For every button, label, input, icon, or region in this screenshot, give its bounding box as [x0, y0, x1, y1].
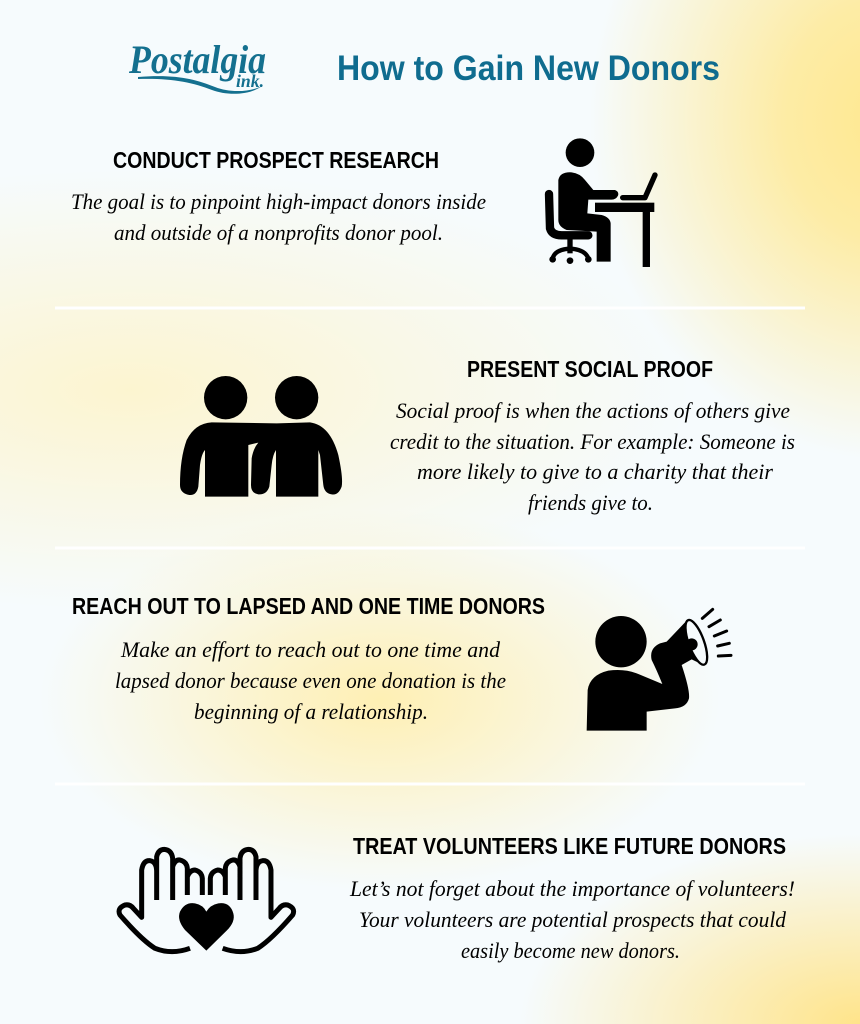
body text: beginning of a relationship. — [194, 699, 428, 724]
body text: easily become new donors. — [461, 938, 680, 963]
heading: CONDUCT PROSPECT RESEARCH — [113, 147, 439, 173]
icon: person at desk — [549, 138, 655, 267]
body text: lapsed donor because even one donation is the — [115, 668, 506, 693]
title: How to Gain New Donors — [337, 49, 720, 88]
body text: more likely to give to a charity that their — [417, 459, 773, 484]
body text — [349, 876, 795, 963]
heading: REACH OUT TO LAPSED AND ONE TIME DONORS — [72, 593, 545, 619]
body text: friends give to. — [528, 490, 653, 515]
section 1: conduct prospect research — [71, 138, 655, 267]
body text: and outside of a nonprofits donor pool. — [114, 220, 443, 245]
body text — [115, 637, 506, 724]
section 3: reach out to lapsed donors — [72, 593, 731, 731]
icon: person with megaphone — [587, 609, 731, 731]
body text: credit to the situation. For example: Someone is — [390, 429, 795, 454]
body text: Your volunteers are potential prospects that could — [359, 907, 787, 932]
body text: Make an effort to reach out to one time and — [120, 637, 501, 662]
icon: two people — [180, 376, 342, 497]
logo: ink. — [236, 71, 264, 91]
logo: Postalgia — [128, 37, 266, 82]
icon: hands holding heart — [119, 849, 294, 952]
heading: PRESENT SOCIAL PROOF — [467, 356, 713, 382]
heading: TREAT VOLUNTEERS LIKE FUTURE DONORS — [353, 833, 786, 859]
section 4: treat volunteers like future donors — [119, 833, 795, 963]
body text — [71, 189, 486, 245]
body text: The goal is to pinpoint high-impact donors inside — [71, 189, 486, 214]
body text — [390, 398, 795, 515]
body text: Let’s not forget about the importance of volunteers! — [349, 876, 795, 901]
body text: Social proof is when the actions of others give — [396, 398, 790, 423]
section 2: present social proof — [180, 356, 795, 515]
